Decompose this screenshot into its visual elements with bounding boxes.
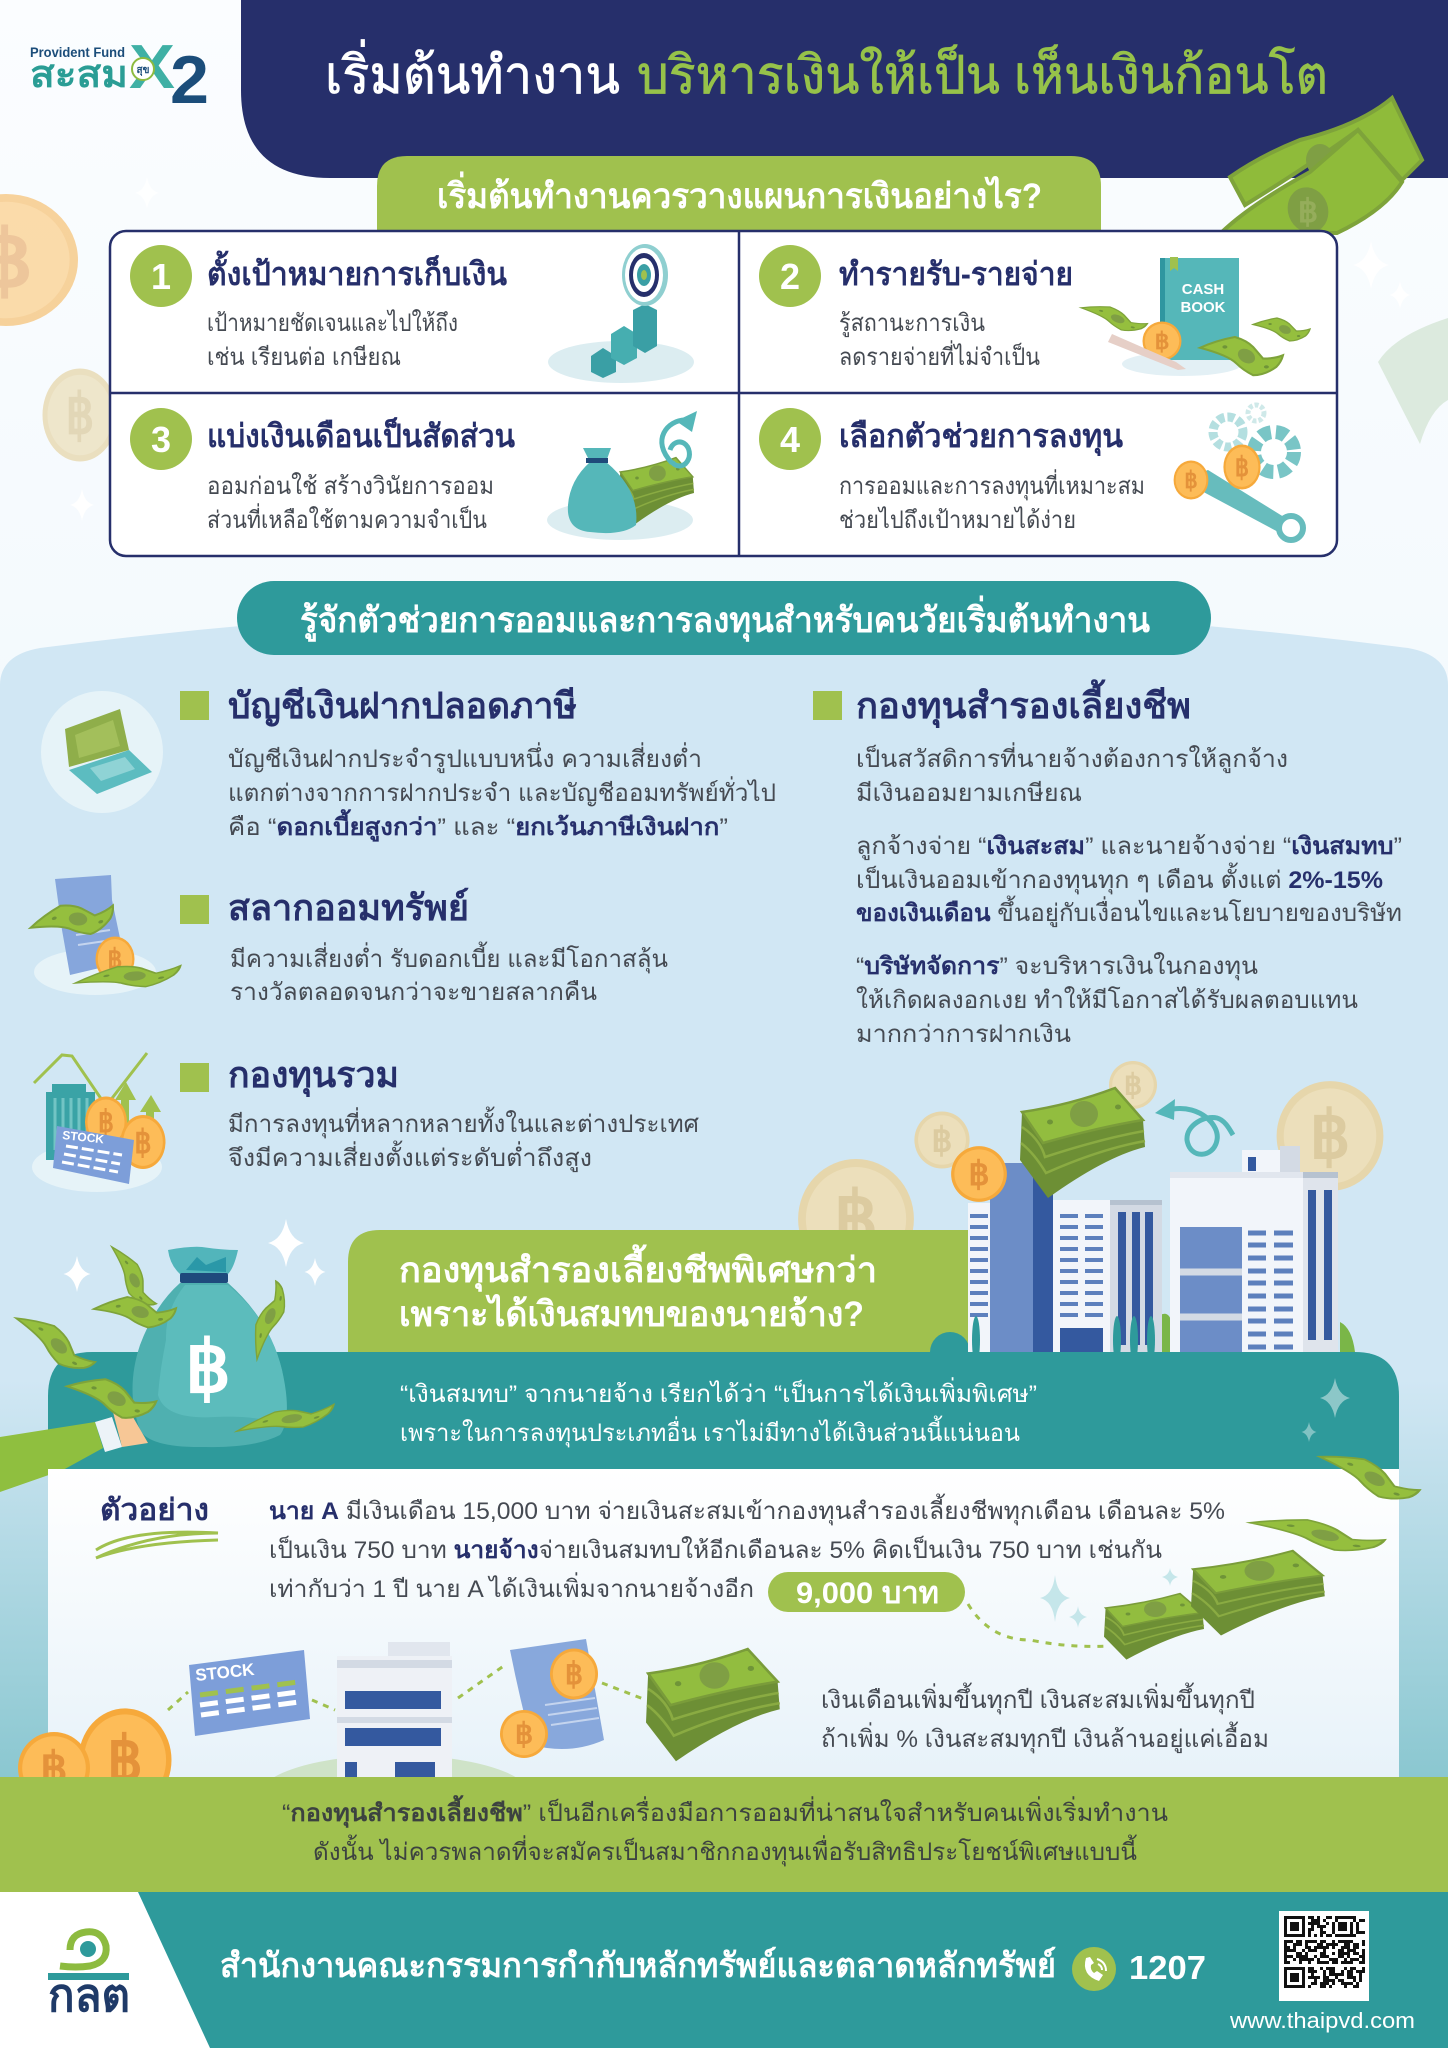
- illustration: office buildings: [930, 1146, 1355, 1372]
- paragraph 3: “บริษัทจัดการ” จะบริหารเงินในกองทุน: [856, 952, 1258, 981]
- section tab: planning question: [377, 156, 1101, 230]
- illustration: money bag with hand: ฿: [185, 1328, 231, 1408]
- step 4: [759, 408, 1145, 534]
- bullet: [813, 691, 842, 720]
- step 4: เลือกตัวช่วยการลงทุน: [839, 418, 1123, 457]
- icon: phone: [1072, 1947, 1116, 1991]
- logo: SEC Thailand: [48, 1932, 130, 2021]
- step 1: 1: [151, 256, 171, 297]
- illustration: coin, banknote stack and arrow: [951, 1088, 1233, 1202]
- logo: Provident Fund x2: [30, 33, 209, 118]
- section tab: planning question: เริ่มต้นทำงานควรวางแผนการเงินอย่างไร?: [437, 171, 1042, 216]
- text: salary grows: เงินเดือนเพิ่มขึ้นทุกปี เงินสะสมเพิ่มขึ้นทุกปี: [821, 1682, 1255, 1715]
- paragraph 3: มากกว่าการฝากเงิน: [856, 1021, 1071, 1048]
- example text: เป็นเงิน 750 บาท นายจ้างจ่ายเงินสมทบให้อีกเดือนละ 5% คิดเป็นเงิน 750 บาท เช่นกัน: [269, 1535, 1162, 1564]
- icons: stock, building, documents: STOCK: [194, 1660, 256, 1685]
- example text: [269, 1493, 1225, 1603]
- QR code: [1279, 1911, 1369, 2001]
- heading: กองทุนสำรองเลี้ยงชีพ: [856, 679, 1191, 729]
- bullet: [180, 1063, 209, 1092]
- body: [228, 1106, 699, 1173]
- icon: stock chart and coins: STOCK: [62, 1128, 105, 1146]
- decorative faded banknote: [1378, 318, 1448, 444]
- step 1: ตั้งเป้าหมายการเก็บเงิน: [207, 250, 507, 292]
- text: salary grows: [821, 1682, 1269, 1754]
- bullet: [180, 895, 209, 924]
- paragraph 3: ให้เกิดผลงอกเงย ทำให้มีโอกาสได้รับผลตอบแทน: [856, 986, 1358, 1014]
- example text: เท่ากับว่า 1 ปี นาย A ได้เงินเพิ่มจากนายจ้างอีก: [269, 1572, 754, 1603]
- illustration: banknote top right: [1222, 98, 1422, 238]
- paragraph 2: ของเงินเดือน ขึ้นอยู่กับเงื่อนไขและนโยบายของบริษัท: [856, 895, 1402, 928]
- green question heading: [348, 1230, 980, 1352]
- paragraph 2: ลูกจ้างจ่าย “เงินสะสม” และนายจ้างจ่าย “ เงินสมทบ”: [856, 833, 1402, 861]
- amount pill: [768, 1572, 965, 1612]
- body: [230, 941, 668, 1006]
- item: mutual fund: [180, 1054, 699, 1173]
- decorative pale coin left: [0, 194, 78, 326]
- icon: cash book: CASH: [1182, 281, 1224, 298]
- body: คือ “ดอกเบี้ยสูงกว่า ” และ “ยกเว้นภาษีเงินฝาก ”: [228, 808, 728, 842]
- paragraph 1: [856, 742, 1288, 807]
- logo: Provident Fund x2: สะสม: [30, 54, 128, 96]
- heading: สลากออมทรัพย์: [228, 887, 469, 928]
- body: มีการลงทุนที่หลากหลายทั้งในและต่างประเทศ: [228, 1106, 699, 1139]
- example label: ตัวอย่าง: [100, 1494, 209, 1527]
- text: salary grows: ถ้าเพิ่ม % เงินสะสมทุกปี เงินล้านอยู่แค่เอื้อม: [821, 1721, 1269, 1754]
- icon: cash book: [1078, 257, 1310, 376]
- title: บริหารเงินให้เป็น เห็นเงินก้อนโต: [637, 45, 1328, 105]
- green question heading: เพราะได้เงินสมทบของนายจ้าง?: [399, 1293, 864, 1334]
- teal statement band: “เงินสมทบ” จากนายจ้าง เรียกได้ว่า “เป็นการได้เงินเพิ่มพิเศษ”: [400, 1377, 1037, 1408]
- footer: [0, 1892, 1448, 2048]
- body: แตกต่างจากการฝากประจำ และบัญชีออมทรัพย์ทั่วไป: [228, 776, 776, 807]
- icon: cash book: BOOK: [1180, 299, 1226, 316]
- paragraph 3: [856, 952, 1358, 1048]
- money stacks: [968, 1551, 1325, 1660]
- green question heading: กองทุนสำรองเลี้ยงชีพพิเศษกว่า: [399, 1244, 877, 1292]
- logo: Provident Fund x2: Provident Fund: [30, 44, 125, 60]
- item: provident fund text: [813, 679, 1402, 1048]
- logo: Provident Fund x2: สุข: [137, 65, 150, 76]
- step 1: [130, 245, 507, 371]
- step 3: ออมก่อนใช้ สร้างวินัยการออม: [207, 472, 494, 500]
- decorative pale coin second: [42, 368, 118, 462]
- sparkles: [70, 177, 1410, 521]
- amount pill: 9,000 บาท: [796, 1577, 939, 1610]
- paragraph 1: มีเงินออมยามเกษียณ: [856, 780, 1082, 807]
- panel: worked example: [18, 1469, 1399, 1835]
- icon: gears and wrench: [1174, 405, 1303, 540]
- pale coins behind buildings: [798, 1061, 1383, 1279]
- body: บัญชีเงินฝากประจำรูปแบบหนึ่ง ความเสี่ยงต่ำ: [228, 742, 702, 774]
- example text: นาย A มีเงินเดือน 15,000 บาท จ่ายเงินสะสมเข้ากองทุนสำรองเลี้ยงชีพทุกเดือน เดือนละ 5%: [269, 1493, 1225, 1526]
- header band: [241, 0, 1448, 178]
- green conclusion band: “กองทุนสำรองเลี้ยงชีพ ” เป็นอีกเครื่องมือการออมที่น่าสนใจสำหรับคนเพิ่งเริ่มทำงาน: [282, 1794, 1168, 1829]
- paragraph 2: [856, 833, 1402, 928]
- step 1: เช่น เรียนต่อ เกษียณ: [207, 344, 401, 371]
- step 2: ทำรายรับ-รายจ่าย: [839, 256, 1073, 292]
- heading: กองทุนรวม: [228, 1054, 399, 1098]
- title: เริ่มต้นทำงาน: [325, 39, 620, 105]
- illustration: banknote top right: ฿: [1298, 193, 1318, 229]
- green conclusion band: [0, 1777, 1448, 1892]
- body: [228, 742, 776, 842]
- icon: money bag and arrow: [547, 411, 697, 540]
- logo: Provident Fund x2: X: [129, 33, 175, 102]
- icon: stock chart and coins: [32, 1053, 166, 1192]
- step 2: 2: [780, 256, 800, 297]
- icons: stock, building, documents: [18, 1639, 780, 1835]
- section 2 background: [0, 604, 1448, 1800]
- website: www.thaipvd.com: [1229, 2008, 1415, 2033]
- icon: bank book: [41, 691, 163, 813]
- body: รางวัลตลอดจนกว่าจะขายสลากคืน: [230, 979, 597, 1006]
- step 3: แบ่งเงินเดือนเป็นสัดส่วน: [207, 416, 515, 454]
- green conclusion band: ดังนั้น ไม่ควรพลาดที่จะสมัครเป็นสมาชิกกองทุนเพื่อรับสิทธิประโยชน์พิเศษแบบนี้: [313, 1834, 1137, 1867]
- step 3: 3: [151, 419, 171, 460]
- organisation name: สำนักงานคณะกรรมการกำกับหลักทรัพย์และตลาดหลักทรัพย์: [220, 1946, 1056, 1985]
- sparkles near bag: [64, 1219, 326, 1292]
- title: [325, 39, 1328, 105]
- example label: [96, 1494, 218, 1558]
- step 4: การออมและการลงทุนที่เหมาะสม: [839, 469, 1145, 501]
- heading: บัญชีเงินฝากปลอดภาษี: [228, 685, 577, 727]
- body: จึงมีความเสี่ยงตั้งแต่ระดับต่ำถึงสูง: [228, 1140, 592, 1173]
- illustration: money bag with hand: [0, 1242, 337, 1492]
- teal statement band: เพราะในการลงทุนประเภทอื่น เราไม่มีทางได้เงินส่วนนี้แน่นอน: [400, 1415, 1020, 1448]
- step 2: ลดรายจ่ายที่ไม่จำเป็น: [839, 340, 1040, 371]
- item: tax-free deposit: [180, 685, 776, 842]
- logo: Provident Fund x2: 2: [170, 42, 209, 118]
- step 3: [130, 408, 515, 534]
- step 1: เป้าหมายชัดเจนและไปให้ถึง: [207, 309, 458, 337]
- icon: target and bars: [548, 244, 694, 383]
- item: savings certificate: [180, 887, 668, 1006]
- panel: four planning steps: [110, 231, 1337, 556]
- section banner: savings helpers: [237, 581, 1211, 655]
- paragraph 1: เป็นสวัสดิการที่นายจ้างต้องการให้ลูกจ้าง: [856, 742, 1288, 774]
- paragraph 2: เป็นเงินออมเข้ากองทุนทุก ๆ เดือน ตั้งแต่ 2%-15%: [856, 862, 1383, 895]
- logo: SEC Thailand: กลต: [48, 1969, 130, 2021]
- step 2: รู้สถานะการเงิน: [839, 310, 985, 338]
- step 3: ส่วนที่เหลือใช้ตามความจำเป็น: [207, 503, 487, 534]
- body: มีความเสี่ยงต่ำ รับดอกเบี้ย และมีโอกาสลุ้น: [230, 941, 668, 974]
- step 2: [759, 245, 1073, 371]
- step 4: ช่วยไปถึงเป้าหมายได้ง่าย: [839, 506, 1076, 534]
- step 4: 4: [780, 419, 800, 460]
- flying banknotes right: [1249, 1448, 1423, 1554]
- section banner: savings helpers: รู้จักตัวช่วยการออมและการลงทุนสำหรับคนวัยเริ่มต้นทำงาน: [300, 595, 1150, 642]
- hotline: 1207: [1129, 1949, 1206, 1986]
- bullet: [180, 691, 209, 720]
- teal statement band: [48, 1352, 1399, 1469]
- icon: savings paper: [27, 875, 183, 1001]
